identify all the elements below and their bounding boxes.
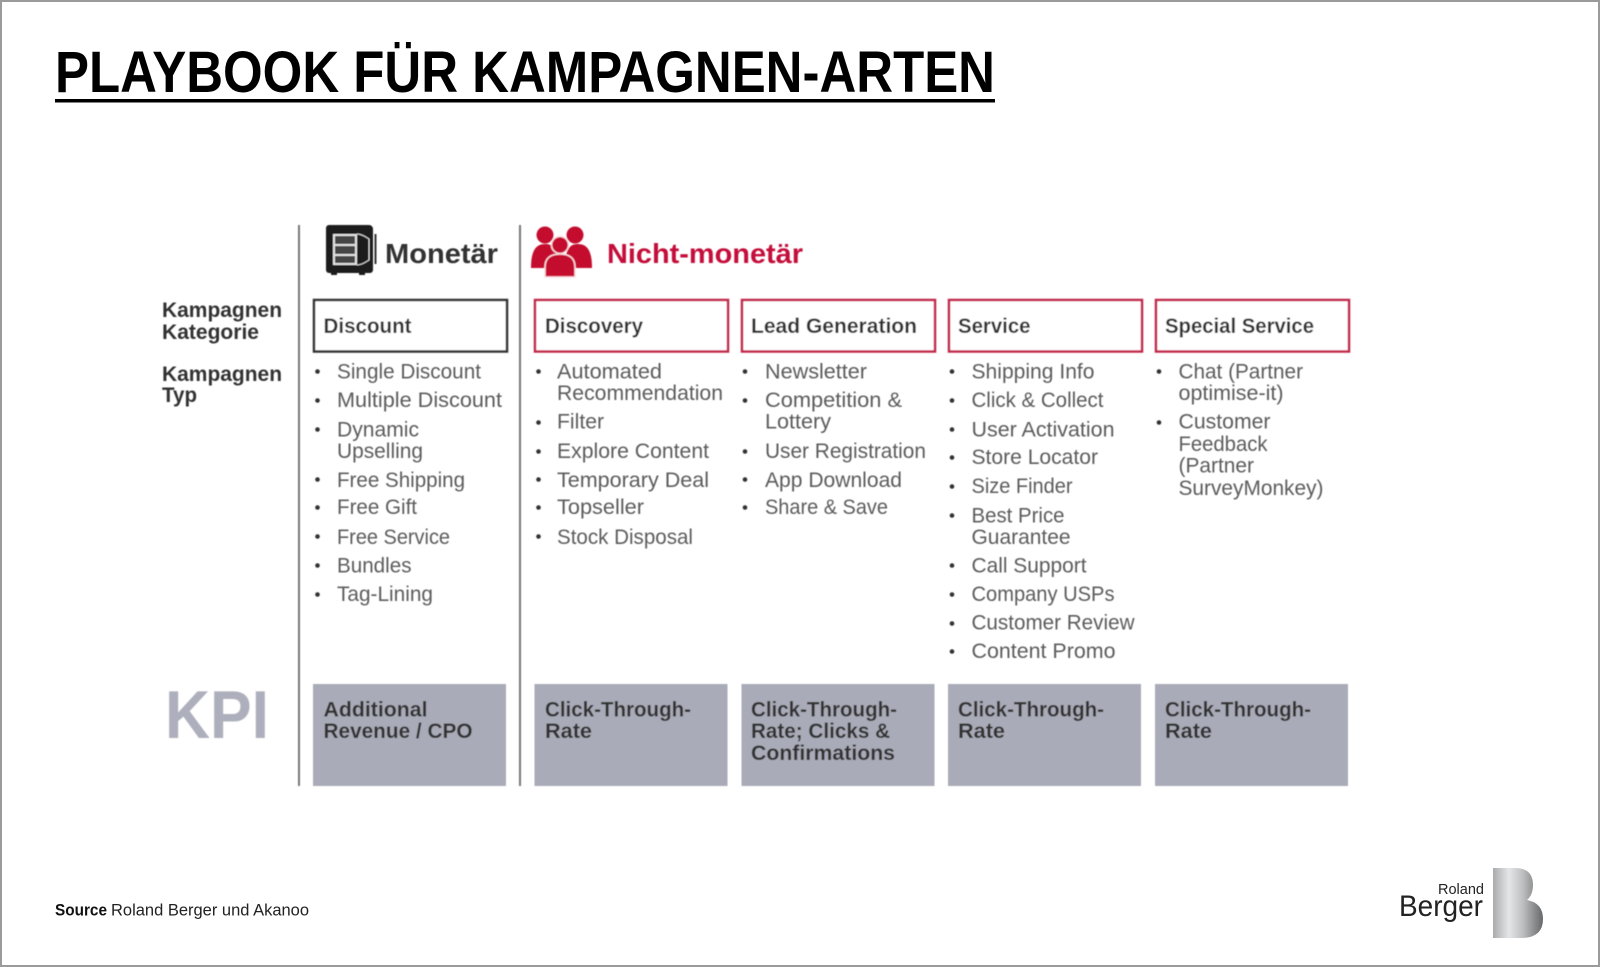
- column: Service: Best Price: [972, 504, 1064, 528]
- column: Discovery: Stock Disposal: [557, 526, 693, 549]
- icon: people: [531, 226, 592, 277]
- column: Service: Customer Review: [972, 612, 1135, 635]
- column: Service: Call Support: [972, 554, 1087, 578]
- column: Service: Shipping Info: [972, 361, 1094, 384]
- KPI: Special Service: Click-Through-: [1165, 698, 1311, 722]
- column: Special Service: Special Service: [1165, 315, 1314, 338]
- column: Discovery: Automated: [557, 361, 662, 384]
- logo: Roland Berger: Berger: [1399, 890, 1483, 923]
- column: Discount: Upselling: [337, 440, 423, 463]
- icon: safe: [326, 225, 376, 275]
- KPI: Lead Generation: Confirmations: [751, 742, 895, 765]
- column: Service: Store Locator: [972, 446, 1098, 469]
- column: Service: Service: [958, 315, 1030, 338]
- KPI: Service: [948, 684, 1141, 786]
- column: Discount: Discount: [324, 315, 412, 338]
- column: Special Service: Customer: [1178, 411, 1270, 434]
- column: Special Service: SurveyMonkey): [1178, 477, 1324, 500]
- column: Special Service: [1156, 300, 1349, 500]
- column: Discount: Dynamic: [337, 419, 419, 442]
- KPI: Discovery: Click-Through-: [545, 698, 691, 722]
- column: Discount: Bundles: [337, 554, 412, 578]
- KPI: Special Service: Rate: [1165, 720, 1212, 743]
- column: Discount: Free Service: [337, 526, 450, 549]
- column: Discovery: Recommendation: [557, 382, 723, 405]
- column: Discount: Multiple Discount: [337, 389, 502, 412]
- title: PLAYBOOK FÜR KAMPAGNEN-ARTEN: [55, 40, 995, 105]
- column: Discovery: Discovery: [545, 315, 643, 338]
- column: Lead Generation: Share & Save: [765, 496, 888, 519]
- KPI: Discount: Additional: [324, 698, 428, 722]
- row labels: Typ: [162, 384, 197, 407]
- column: Discount: Tag-Lining: [337, 583, 433, 606]
- source note: Source: [55, 900, 107, 920]
- column: Discount: Free Shipping: [337, 469, 465, 492]
- column: Discount: Single Discount: [337, 361, 481, 384]
- heading: Monetär: Monetär: [385, 238, 498, 269]
- heading: Nicht-monetär: Nicht-monetär: [607, 238, 803, 269]
- KPI: Lead Generation: Click-Through-: [751, 698, 897, 722]
- column: Lead Generation: Lottery: [765, 411, 832, 434]
- KPI: Discount: Revenue / CPO: [324, 720, 472, 743]
- column: Lead Generation: Competition &: [765, 389, 902, 412]
- KPI: Discount: [313, 684, 506, 786]
- column: Service: Guarantee: [972, 526, 1070, 549]
- KPI: Lead Generation: [742, 684, 934, 786]
- row labels: Kampagnen: [162, 363, 282, 386]
- KPI: Lead Generation: Rate; Clicks &: [751, 720, 890, 743]
- KPI: Service: Click-Through-: [958, 698, 1104, 722]
- column: Lead Generation: App Download: [765, 469, 902, 492]
- column: Lead Generation: [742, 300, 935, 519]
- column: Special Service: Chat (Partner: [1178, 361, 1303, 384]
- column: Special Service: optimise-it): [1178, 382, 1284, 405]
- column: Discovery: [535, 300, 728, 549]
- column: Special Service: (Partner: [1178, 454, 1254, 478]
- source note: Roland Berger und Akanoo: [111, 900, 309, 920]
- column: Service: Content Promo: [972, 640, 1116, 663]
- column: Discount: Free Gift: [337, 496, 417, 519]
- column: Service: [949, 300, 1142, 663]
- row labels: [162, 299, 282, 407]
- row labels: Kategorie: [162, 321, 259, 344]
- row labels: Kampagnen: [162, 299, 282, 322]
- playbook chart: [162, 225, 1349, 786]
- KPI: Discovery: Rate: [545, 720, 592, 743]
- column: Special Service: Feedback: [1178, 433, 1268, 456]
- KPI label: KPI: [165, 677, 269, 753]
- column: Service: User Activation: [972, 419, 1114, 442]
- column: Discount: [314, 300, 507, 606]
- KPI: Service: Rate: [958, 720, 1005, 743]
- KPI: Discovery: [534, 684, 728, 786]
- column: Discovery: Topseller: [557, 496, 644, 519]
- column: Lead Generation: User Registration: [765, 440, 926, 463]
- column: Discovery: Temporary Deal: [557, 469, 709, 492]
- KPI: Special Service: [1155, 684, 1348, 786]
- column: Lead Generation: Newsletter: [765, 361, 867, 384]
- column: Discovery: Filter: [557, 411, 604, 434]
- logo: Roland Berger: [1399, 868, 1543, 938]
- column: Service: Size Finder: [972, 475, 1072, 498]
- column: Service: Click & Collect: [972, 389, 1104, 412]
- column: Lead Generation: Lead Generation: [751, 315, 917, 338]
- column: Discovery: Explore Content: [557, 440, 709, 463]
- column: Service: Company USPs: [972, 583, 1114, 606]
- logo: Roland Berger: Roland: [1438, 881, 1484, 898]
